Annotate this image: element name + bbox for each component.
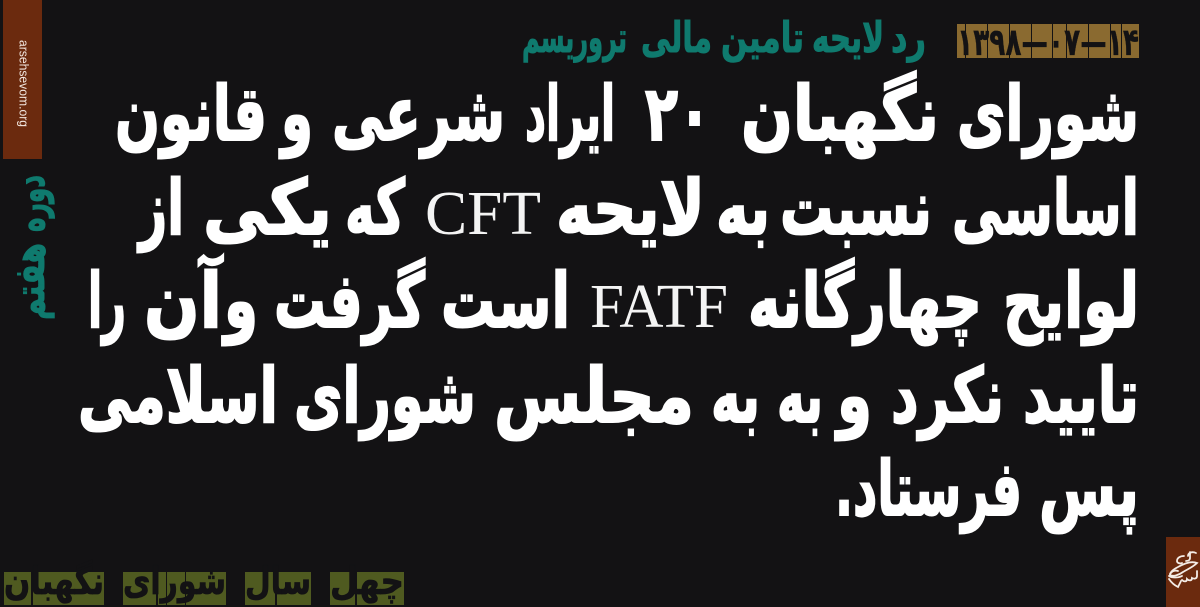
footer tag: forty years of the Guardian Council: شورای [123,559,226,603]
footer tag: forty years of the Guardian Council: چهل [330,559,404,603]
line 3: چهارگانه [748,256,982,346]
line 5: فرستاد. [835,444,1022,534]
main statement text [78,69,1139,534]
line 2: نسبت [780,163,932,252]
panel: website side tab [3,0,42,159]
footer tag: forty years of the Guardian Council: نگهبان [4,559,104,603]
line 5: پس [1039,444,1139,534]
heading: rejected bill: مالی [641,13,712,62]
line 4: شورای [294,351,476,441]
line 3: است [441,256,570,345]
vertical heading: term: دوره [5,175,55,232]
line 3: FATF [590,273,728,341]
line 4: مجلس [494,351,694,440]
line 1: نگهبان [741,69,939,159]
line 3: را [88,256,126,346]
line 1: ایراد [525,69,615,159]
line 2: که [345,163,406,252]
line 4: به [711,351,760,440]
line 1: و [278,69,313,159]
line 4: به [777,351,823,440]
line 3: و [221,256,258,346]
line 2: لایحه [556,163,705,252]
logo badge [1166,537,1200,607]
line 2: از [136,163,184,253]
line 1: قانون [115,69,267,159]
line 2: CFT [425,180,541,248]
line 3: گرفت [274,256,426,346]
line 4: و [834,351,872,441]
heading: rejected bill: تامین [721,13,804,63]
heading: rejected bill [522,13,926,63]
line 4 [78,351,1139,441]
line 4: اسلامی [78,351,278,440]
heading: rejected bill: رد [891,13,926,62]
vertical heading: term: هفتم [5,243,54,320]
line 2: به [716,163,770,252]
line 2: یکی [203,163,332,252]
line 1: شرعی [332,69,505,159]
heading: rejected bill: لایحه [812,13,884,62]
footer tag: forty years of the Guardian Council: سال [245,559,311,603]
line 4: نکرد [891,351,1004,441]
line 3: لوایح [1003,256,1139,346]
line 3 [88,254,1139,346]
line 1 [115,69,1139,159]
heading: rejected bill: تروریسم [522,13,627,63]
line 2 [136,163,1139,253]
panel: website side tab: arsehsevom.org [16,40,30,127]
line 4: تایید [1023,351,1139,440]
line 3: آن [144,254,224,345]
footer tag: forty years of the Guardian Council [4,559,404,605]
line 1: ۲۰ [645,69,711,158]
